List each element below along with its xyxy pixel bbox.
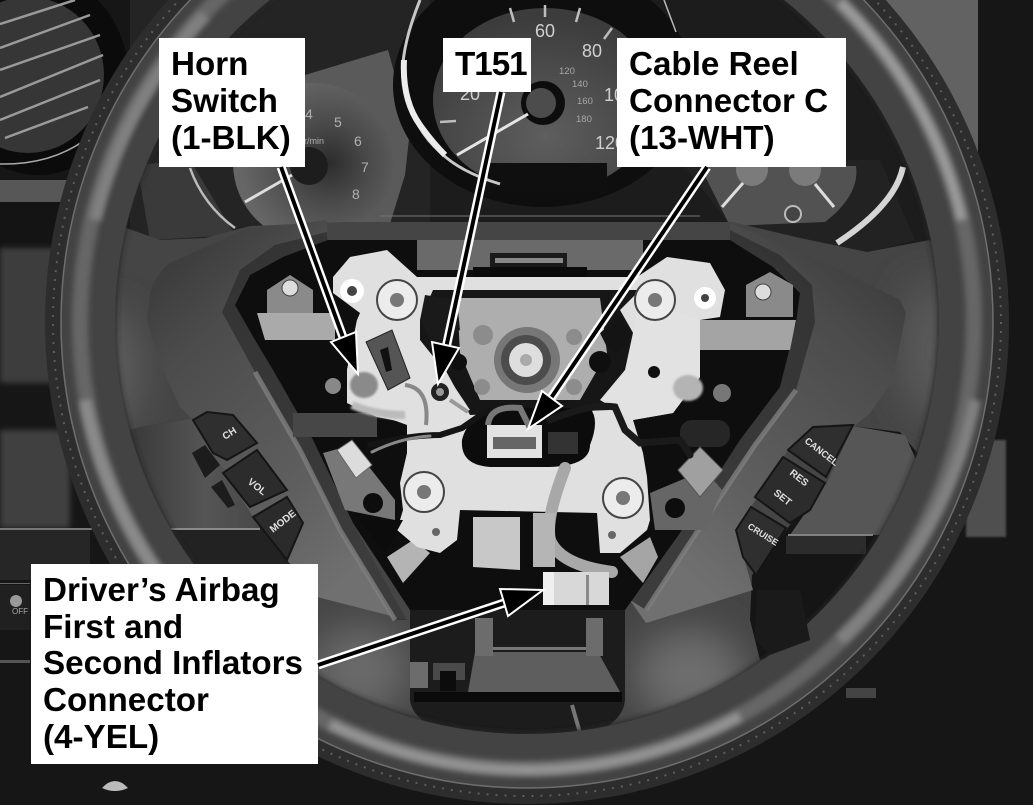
speedometer gauge: 140 <box>572 79 588 90</box>
side brackets <box>257 272 796 583</box>
label: driver's airbag connector <box>31 564 318 764</box>
speedometer gauge: 20 <box>460 84 480 104</box>
arrow: cable reel connector <box>528 167 707 429</box>
speedometer gauge: 60 <box>535 21 555 41</box>
tachometer gauge: 6 <box>354 133 362 149</box>
T151 ground screw <box>431 383 468 412</box>
tachometer gauge: 7 <box>361 159 369 175</box>
label: T151 <box>443 38 531 92</box>
speedometer gauge <box>380 0 700 216</box>
tachometer gauge: r/min <box>304 136 324 146</box>
label: driver's airbag connector: Connector <box>43 682 209 719</box>
bolt centers <box>347 286 709 539</box>
label: horn switch: Horn <box>171 46 248 83</box>
label: driver's airbag connector: (4-YEL) <box>43 719 159 756</box>
right control buttons: RES <box>787 468 810 489</box>
label: driver's airbag connector: First and <box>43 609 183 646</box>
lower center opening <box>410 604 625 746</box>
left dash opening <box>100 418 295 580</box>
fuel and temperature gauges <box>680 154 915 255</box>
left control buttons: VOL <box>245 477 268 498</box>
label: horn switch: Switch <box>171 83 278 120</box>
label: cable reel connector <box>617 38 846 167</box>
speedometer gauge: 80 <box>582 41 602 61</box>
center hub nut <box>494 327 560 393</box>
plate studs <box>473 325 582 395</box>
tachometer gauge: 8 <box>352 186 360 202</box>
label: horn switch: (1-BLK) <box>171 120 291 157</box>
label: driver's airbag connector: Second Inflators <box>43 645 303 682</box>
tachometer gauge: 5 <box>334 114 342 130</box>
wiring harnesses <box>370 406 690 572</box>
speedometer gauge: 10 <box>604 85 624 105</box>
steering wheel hub web <box>80 222 970 770</box>
tachometer gauge <box>137 50 410 243</box>
label: T151: T151 <box>455 46 527 83</box>
central window <box>347 290 700 425</box>
lower dash details: OFF <box>12 607 28 616</box>
arrow: airbag connector <box>318 589 543 665</box>
arrow: horn switch <box>281 167 358 374</box>
right control buttons: CRUISE <box>746 521 780 548</box>
air vent <box>0 0 128 175</box>
speedometer gauge: 160 <box>577 96 593 107</box>
airbag bracket plate <box>333 250 725 553</box>
mounting bolts <box>340 279 716 518</box>
right control buttons: CANCEL <box>802 436 840 469</box>
lower dash details <box>0 585 810 791</box>
right dash opening <box>750 426 940 660</box>
left steering wheel spoke <box>147 220 407 620</box>
cable reel connector <box>462 408 595 467</box>
label: cable reel connector: (13-WHT) <box>629 120 775 157</box>
left control buttons <box>192 412 303 560</box>
horn switch connector <box>366 330 427 425</box>
lower airbag plastic blocks <box>360 513 555 570</box>
label: horn switch <box>159 38 305 167</box>
tachometer gauge: 4 <box>305 106 313 122</box>
speedometer gauge: 120 <box>595 133 625 153</box>
right control buttons <box>736 425 853 575</box>
right steering wheel spoke <box>630 223 906 623</box>
right control buttons: SET <box>771 488 793 508</box>
label: driver's airbag connector: Driver’s Airbag <box>43 572 280 609</box>
speedometer gauge: 180 <box>576 114 592 125</box>
plate holes <box>451 351 660 378</box>
label: cable reel connector: Cable Reel <box>629 46 799 83</box>
inflators connector <box>543 572 609 605</box>
center mechanism <box>235 240 800 610</box>
label: cable reel connector: Connector C <box>629 83 828 120</box>
horn pads <box>350 372 703 415</box>
left control buttons: MODE <box>268 508 299 535</box>
left control buttons: CH <box>221 426 239 443</box>
arrow: T151 <box>432 92 501 384</box>
speedometer gauge: 120 <box>559 66 575 77</box>
